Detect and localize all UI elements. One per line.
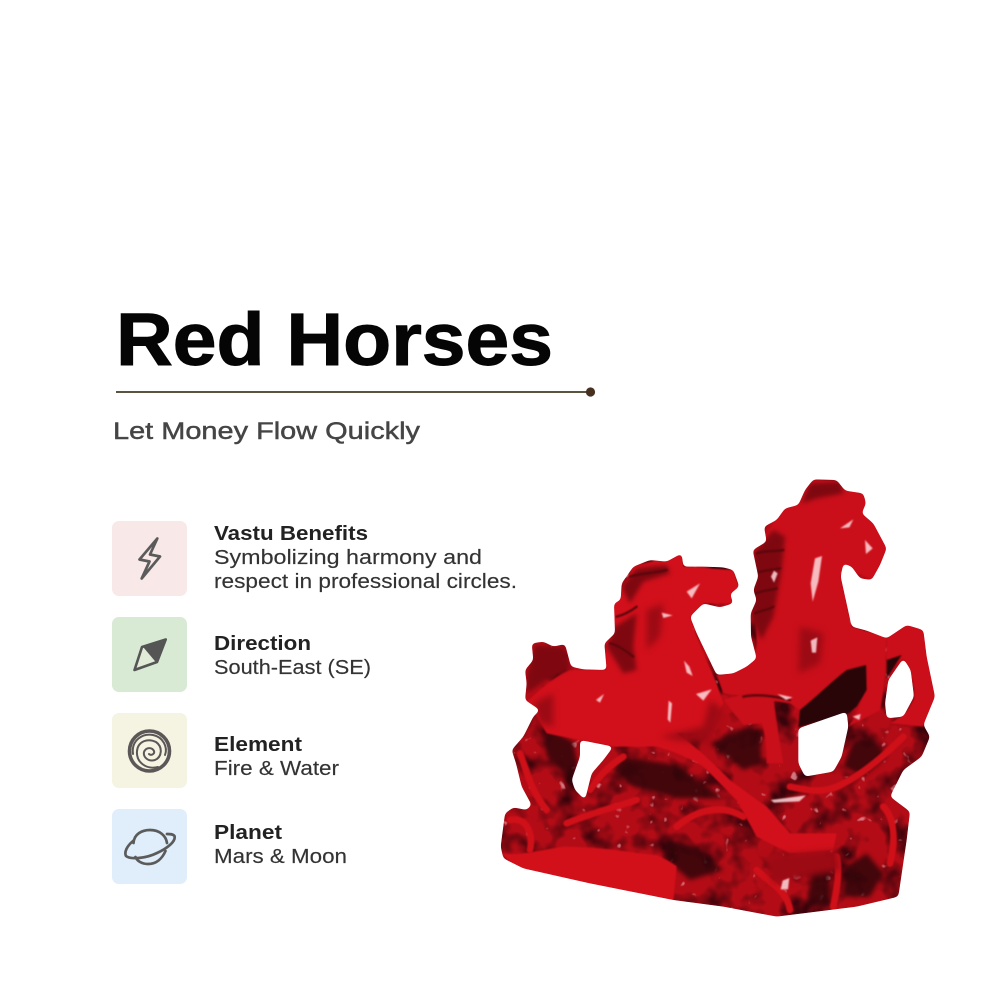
text: Element	[214, 734, 339, 780]
text: Planet	[214, 822, 347, 868]
smooth base plate	[502, 847, 677, 901]
text: Direction: Direction	[214, 633, 311, 655]
icon tile: ringed planet	[112, 809, 187, 884]
text: Vastu Benefits: respect in professional circles.	[214, 571, 517, 593]
text: Direction	[214, 633, 371, 679]
body shading	[533, 603, 840, 883]
title rule with end dot	[116, 387, 595, 397]
rear horse body	[717, 480, 935, 727]
text: Planet: Planet	[214, 822, 282, 844]
item: Planet	[112, 809, 347, 884]
dark crevices	[543, 727, 887, 907]
text: Planet: Mars & Moon	[214, 846, 347, 868]
rock texture	[490, 713, 950, 930]
highlights	[596, 519, 873, 889]
belly shadow	[798, 655, 902, 727]
mane strands	[610, 550, 790, 700]
icon tile: compass needle	[112, 617, 187, 692]
text: Vastu Benefits	[214, 523, 517, 593]
text: Direction: South-East (SE)	[214, 657, 371, 679]
bright rock ridges	[510, 737, 903, 910]
front horse body	[525, 553, 837, 853]
item: Element	[112, 713, 339, 788]
red horses statue	[500, 480, 934, 916]
item: Direction	[112, 617, 371, 692]
item: Vastu Benefits	[112, 521, 517, 596]
text: Vastu Benefits: Symbolizing harmony and	[214, 547, 482, 569]
text: Element: Fire & Water	[214, 758, 339, 780]
mane shadows	[527, 482, 843, 693]
subtitle: Let Money Flow Quickly	[113, 418, 421, 445]
icon tile: lightning bolt	[112, 521, 187, 596]
statue base colour	[525, 480, 934, 714]
text: Element: Element	[214, 734, 302, 756]
icon tile: spiral	[112, 713, 187, 788]
text: Vastu Benefits: Vastu Benefits	[214, 523, 368, 545]
title: Red Horses	[116, 298, 553, 381]
rear horse foreleg	[723, 693, 783, 763]
